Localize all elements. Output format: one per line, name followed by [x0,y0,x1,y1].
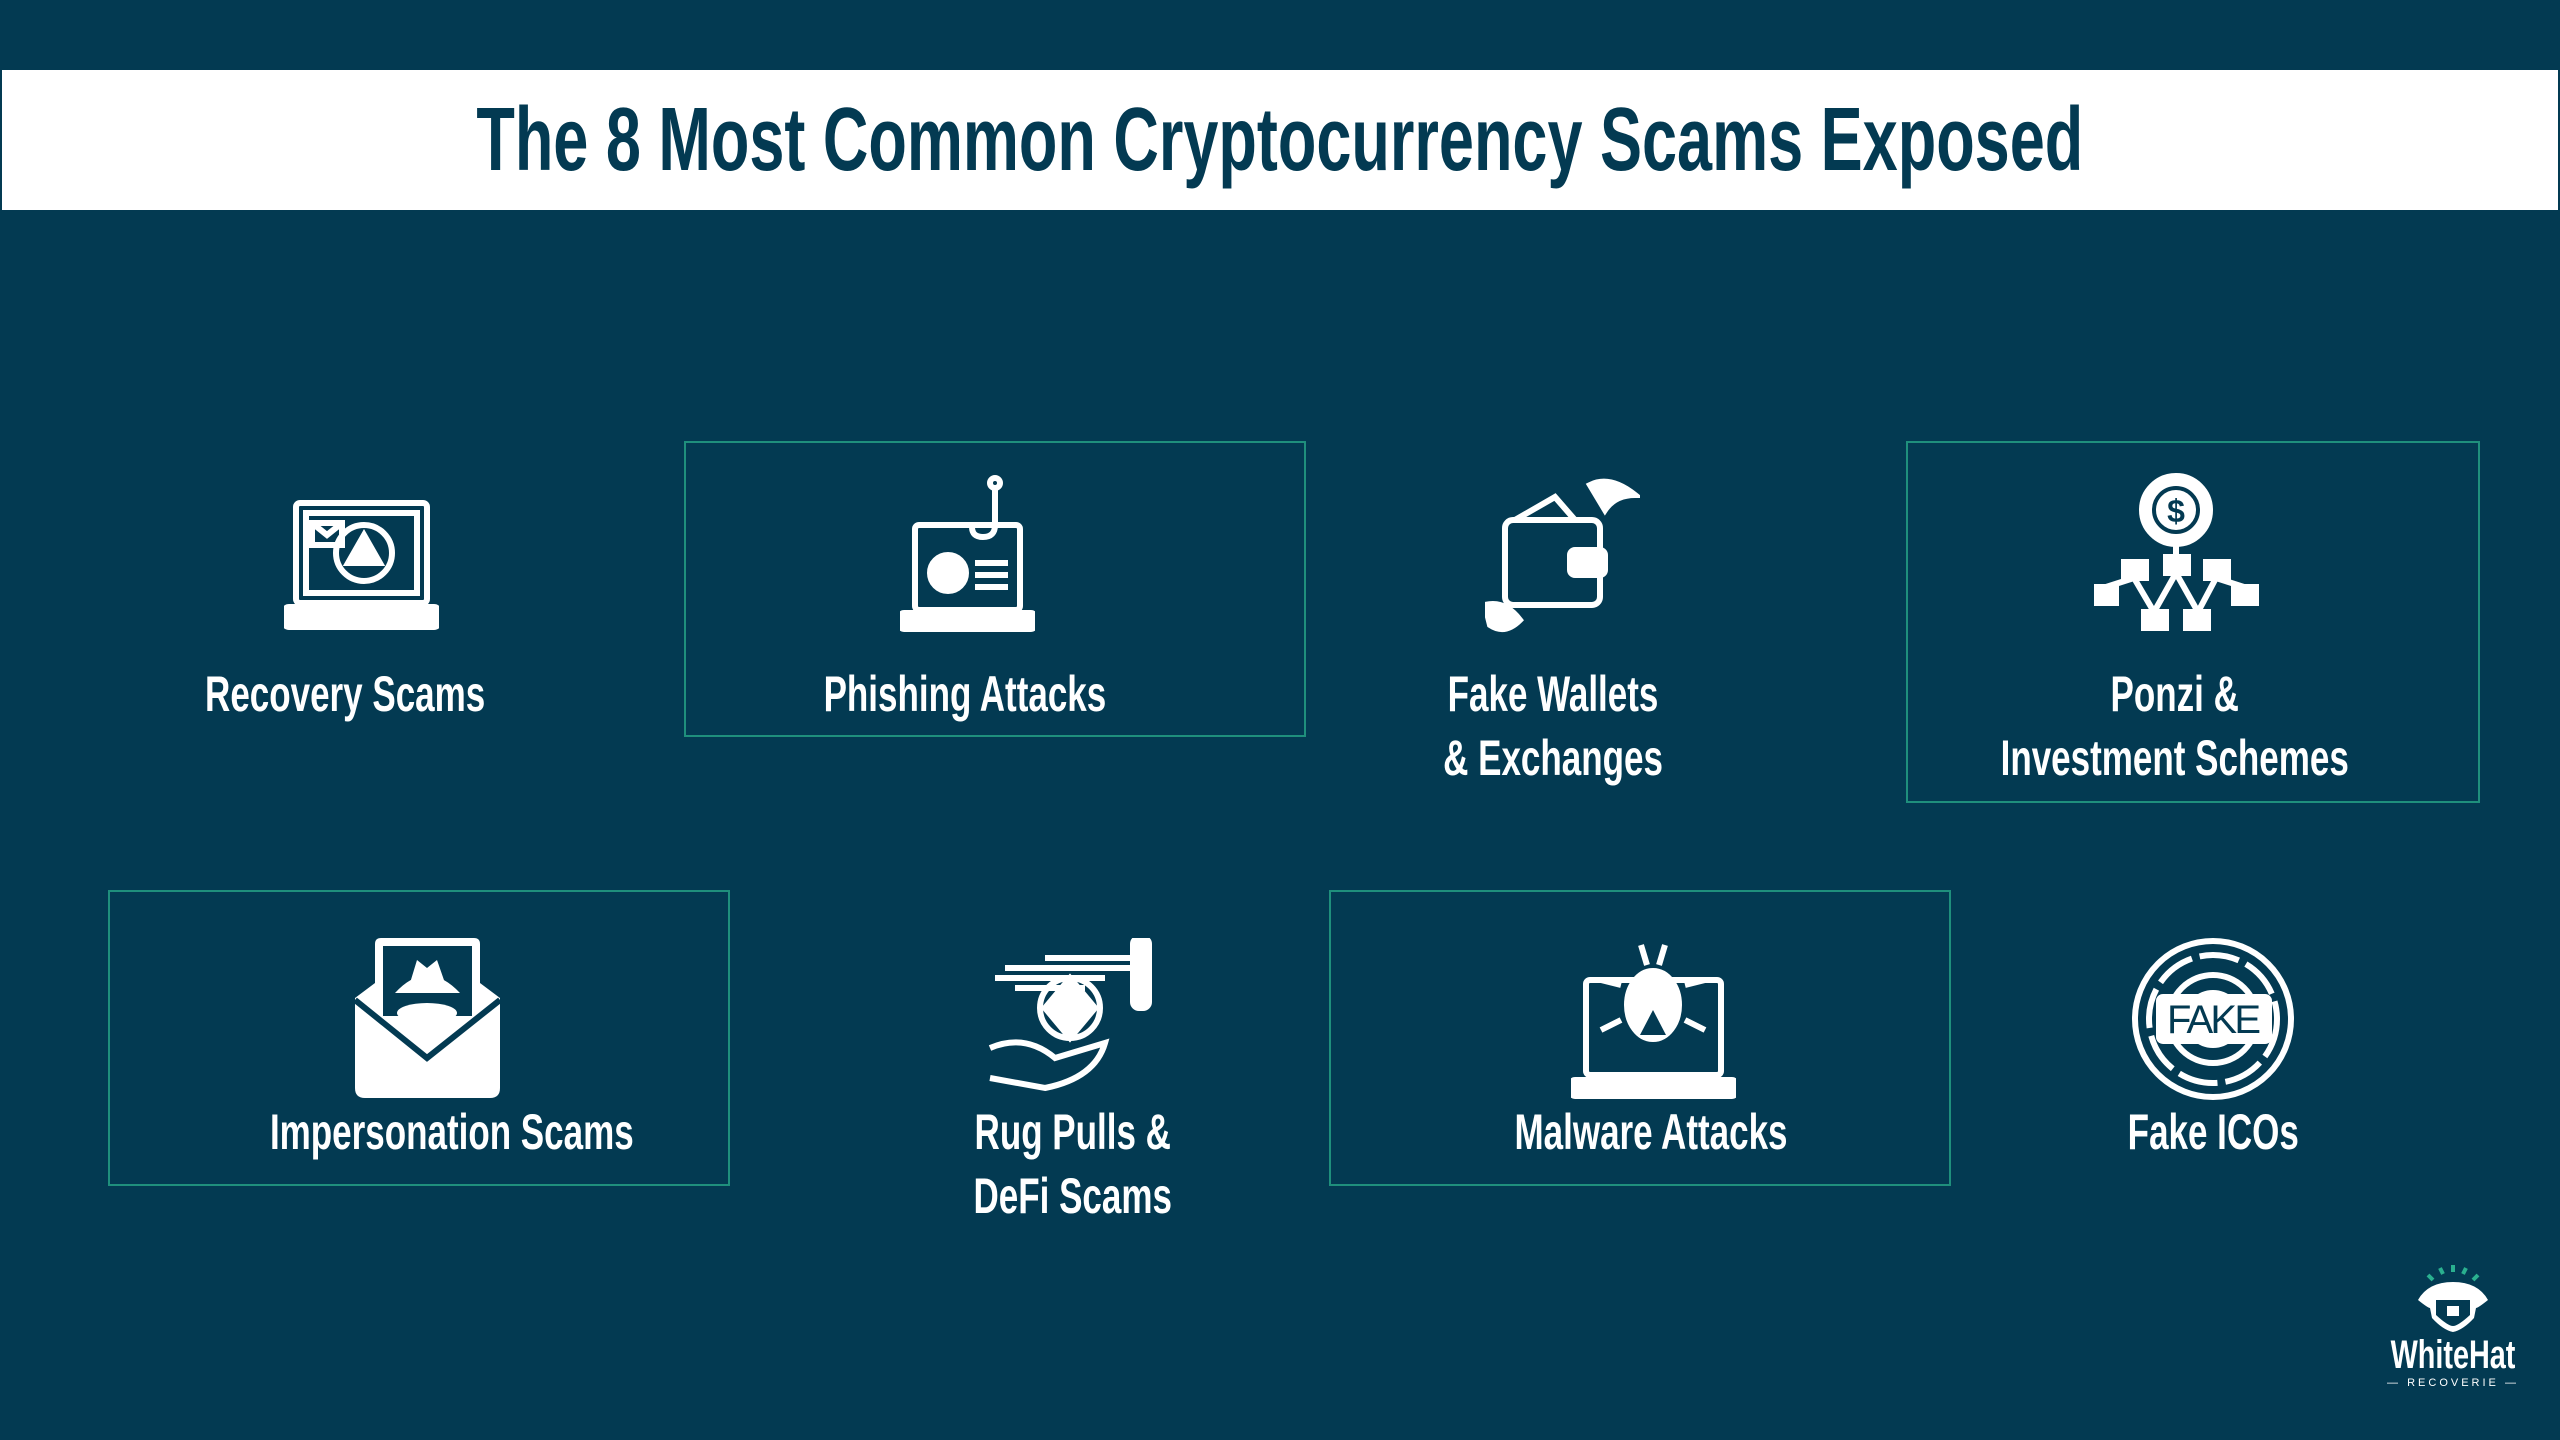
label: ponzi: Ponzi & [2111,666,2239,722]
label: ponzi [2001,666,2349,786]
icon: rug pull [988,938,1152,1091]
label: rug pulls [974,1104,1172,1224]
title: The 8 Most Common Cryptocurrency Scams Exposed [477,90,2083,190]
label: ponzi: Investment Schemes [2001,730,2349,786]
panel: impersonation box [108,890,730,1186]
icon: ponzi [2094,473,2259,631]
label: impersonation scams: Impersonation Scams [270,1104,634,1160]
logo: WhiteHat Recoverie: WhiteHat [2391,1333,2515,1377]
icon: fake ICO [2132,938,2294,1100]
logo: WhiteHat Recoverie: — RECOVERIE — [2387,1377,2519,1389]
label: fake wallets & exchanges: & Exchanges [1443,730,1663,786]
label: fake ICOs: Fake ICOs [2127,1104,2299,1160]
logo: WhiteHat Recoverie [2387,1265,2519,1389]
panel: ponzi box [1906,441,2480,803]
icon: impersonation [355,938,500,1098]
label: rug pulls: DeFi Scams [974,1168,1172,1224]
label: fake wallets & exchanges [1443,666,1663,786]
icon: fake wallet [1485,478,1640,632]
panel: phishing box [684,441,1306,737]
label: rug pulls: Rug Pulls & [975,1104,1171,1160]
label: recovery scams: Recovery Scams [205,666,485,722]
icon: malware [1571,944,1736,1099]
label: fake wallets & exchanges: Fake Wallets [1448,666,1658,722]
label: phishing attacks: Phishing Attacks [824,666,1106,722]
title bar [2,70,2558,210]
icon: phishing [900,475,1035,632]
label: malware attacks: Malware Attacks [1514,1104,1788,1160]
panel: malware box [1329,890,1951,1186]
icon: recovery laptop [284,500,439,630]
icon: ponzi: $ [2167,493,2185,529]
icon: fake ICO: FAKE [2167,998,2261,1042]
